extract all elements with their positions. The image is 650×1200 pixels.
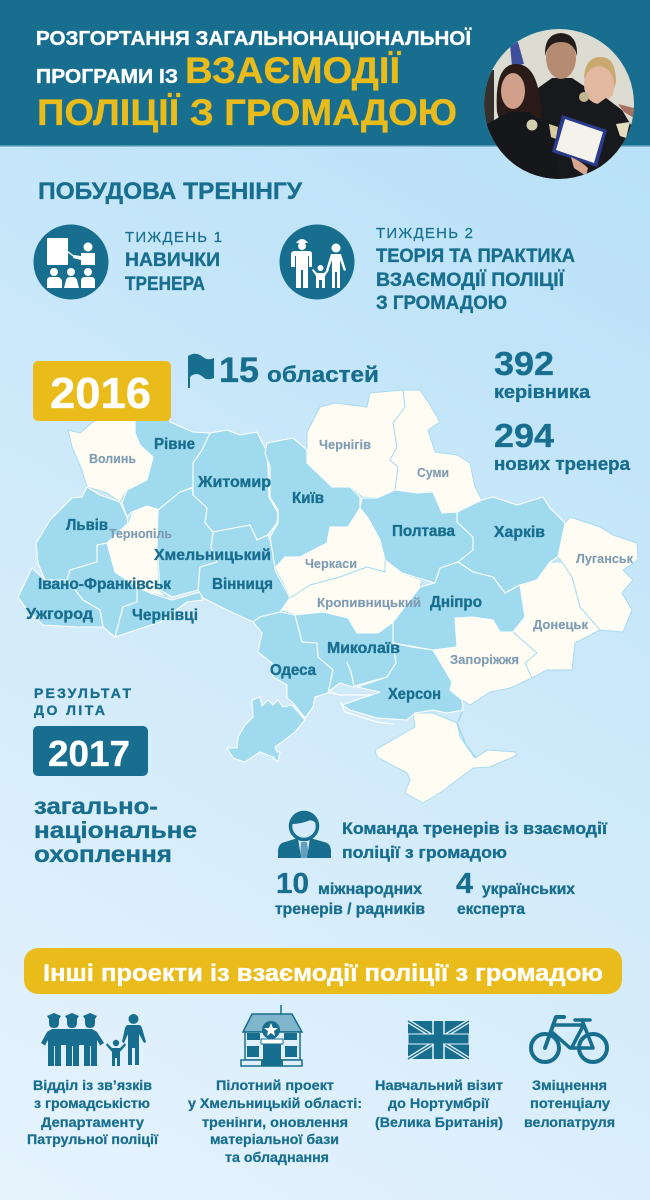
stat: 4 Ukrainian experts: 4 <box>456 868 473 900</box>
result label: РЕЗУЛЬТАТ <box>34 685 131 701</box>
stat: 392 managers: 392 <box>494 345 554 382</box>
text: bike patrol <box>524 1077 615 1130</box>
text: community relations department: Патрульної поліції <box>27 1131 159 1147</box>
year badge 2016 <box>33 361 171 421</box>
title: ПОЛІЦІЇ З ГРОМАДОЮ <box>37 92 457 133</box>
stat: 4 Ukrainian experts <box>456 868 575 918</box>
text: week 1: ТРЕНЕРА <box>125 274 205 295</box>
title: ВЗАЄМОДІЇ <box>185 50 401 91</box>
icon: officer with family <box>280 224 354 300</box>
blue regions: covered oblasts <box>18 415 565 762</box>
stat: 15 regions: 15 <box>219 351 259 390</box>
map labels: not covered oblasts: Чернігів <box>319 438 371 452</box>
text: nationwide coverage <box>34 793 197 867</box>
map labels: not covered oblasts: Запоріжжя <box>450 653 519 667</box>
text: week 2: З ГРОМАДОЮ <box>376 293 507 314</box>
map labels: covered oblasts <box>26 436 545 703</box>
map labels: not covered oblasts: Черкаси <box>305 557 357 571</box>
text: community relations department: з громадськістю <box>34 1095 150 1111</box>
year badge 2016: 2016 <box>50 369 151 418</box>
stat: 10 international trainers: міжнародних <box>318 881 422 898</box>
text: pilot project: та обладнання <box>225 1149 329 1165</box>
stat: 4 Ukrainian experts: експерта <box>457 901 525 918</box>
text: week 1: ТИЖДЕНЬ 1 <box>125 229 222 246</box>
text: community relations department <box>27 1077 159 1147</box>
map labels: not covered oblasts: Луганськ <box>576 552 634 566</box>
heading: training structure: ПОБУДОВА ТРЕНІНГУ <box>38 178 303 205</box>
map labels: covered oblasts: Дніпро <box>430 594 482 611</box>
icon: trainer and audience <box>34 224 108 300</box>
cream regions: oblasts not yet covered <box>68 390 638 803</box>
text: week 1 <box>125 229 222 295</box>
map labels: covered oblasts: Полтава <box>392 523 455 540</box>
text: week 2: ВЗАЄМОДІЇ ПОЛІЦІЇ <box>376 270 565 291</box>
text: pilot project: матеріальної бази <box>210 1131 339 1147</box>
text: bike patrol: велопатруля <box>524 1114 615 1130</box>
stat: 10 international trainers: 10 <box>276 868 309 900</box>
text: team of trainers: Команда тренерів із взаємодії <box>342 820 607 838</box>
map of Ukraine <box>18 390 638 803</box>
map labels: covered oblasts: Вінниця <box>212 576 273 593</box>
title: ПРОГРАМИ ІЗ <box>36 65 178 88</box>
map labels: covered oblasts: Чернівці <box>132 607 198 624</box>
text: team of trainers <box>342 820 607 862</box>
icon: UK flag <box>408 1021 469 1059</box>
stat: 15 regions <box>219 351 379 390</box>
stat: 15 regions: областей <box>267 362 379 387</box>
stat: 392 managers: керівника <box>494 381 591 402</box>
text: bike patrol: потенціалу <box>530 1095 610 1111</box>
text: nationwide coverage: національне <box>34 817 197 843</box>
text: study visit: до Нортумбрії <box>388 1095 490 1111</box>
text: team of trainers: поліції з громадою <box>342 844 507 862</box>
icon: police officers with family <box>41 1013 146 1066</box>
stat: 294 new trainers <box>494 417 631 474</box>
header band <box>0 0 650 146</box>
text: study visit: (Велика Британія) <box>375 1114 503 1130</box>
year badge 2017 <box>33 726 148 776</box>
map labels: not covered oblasts: Суми <box>417 466 449 480</box>
text: pilot project: Пілотний проект <box>216 1077 334 1093</box>
map labels: not covered oblasts: Волинь <box>89 452 136 466</box>
map labels: covered oblasts: Ужгород <box>26 606 93 623</box>
map labels: not covered oblasts: Кропивницький <box>317 596 421 610</box>
text: week 2: ТИЖДЕНЬ 2 <box>376 225 473 242</box>
map labels: covered oblasts: Рівне <box>154 436 195 453</box>
text: pilot project <box>188 1077 362 1165</box>
map labels: covered oblasts: Івано-Франківськ <box>38 576 171 593</box>
text: week 2: ТЕОРІЯ ТА ПРАКТИКА <box>376 246 575 267</box>
icon: flag <box>188 354 214 388</box>
icon: police station building <box>241 1005 302 1066</box>
text: week 2 <box>376 225 575 314</box>
banner: other projects <box>24 948 622 994</box>
stat: 392 managers <box>494 345 591 402</box>
map labels: covered oblasts: Миколаїв <box>327 640 400 657</box>
map labels: covered oblasts: Хмельницький <box>154 547 271 564</box>
text: nationwide coverage: охоплення <box>34 841 172 867</box>
stat: 4 Ukrainian experts: українських <box>482 881 575 898</box>
map labels: not covered oblasts: Тернопіль <box>109 527 172 541</box>
text: community relations department: Відділ із зв’язків <box>33 1077 152 1093</box>
text: week 1: НАВИЧКИ <box>125 250 220 271</box>
banner: other projects: Інші проекти із взаємодії поліції з громадою <box>43 960 603 987</box>
map labels: covered oblasts: Житомир <box>197 474 271 491</box>
map labels: covered oblasts: Харків <box>494 524 545 541</box>
year badge 2017: 2017 <box>48 733 130 774</box>
title: РОЗГОРТАННЯ ЗАГАЛЬНОНАЦІОНАЛЬНОЇ <box>36 27 472 50</box>
stat: 294 new trainers: 294 <box>494 417 555 454</box>
stat: 10 international trainers: тренерів / радників <box>275 901 425 918</box>
text: study visit <box>375 1077 503 1130</box>
coast lines <box>328 692 394 724</box>
map labels: covered oblasts: Херсон <box>388 686 441 703</box>
text: study visit: Навчальний візит <box>375 1077 503 1093</box>
text: pilot project: у Хмельницькій області: <box>188 1095 362 1111</box>
title <box>36 27 472 133</box>
stat: 294 new trainers: нових тренера <box>494 453 631 474</box>
icon: trainer person <box>278 812 331 858</box>
icon: bicycle <box>531 1017 607 1062</box>
text: community relations department: Департаменту <box>41 1114 144 1130</box>
map labels: not covered oblasts <box>89 438 634 667</box>
map labels: covered oblasts: Київ <box>292 490 324 507</box>
text: bike patrol: Зміцнення <box>532 1077 607 1093</box>
text: pilot project: тренінги, оновлення <box>202 1114 348 1130</box>
stat: 10 international trainers <box>275 868 425 918</box>
result label <box>34 685 131 718</box>
map labels: not covered oblasts: Донецьк <box>533 618 589 632</box>
map labels: covered oblasts: Львів <box>66 517 108 534</box>
result label: ДО ЛІТА <box>34 702 105 718</box>
text: nationwide coverage: загально- <box>34 793 158 819</box>
map labels: covered oblasts: Одеса <box>270 662 316 679</box>
photo: three police officers with certificate <box>484 29 634 179</box>
